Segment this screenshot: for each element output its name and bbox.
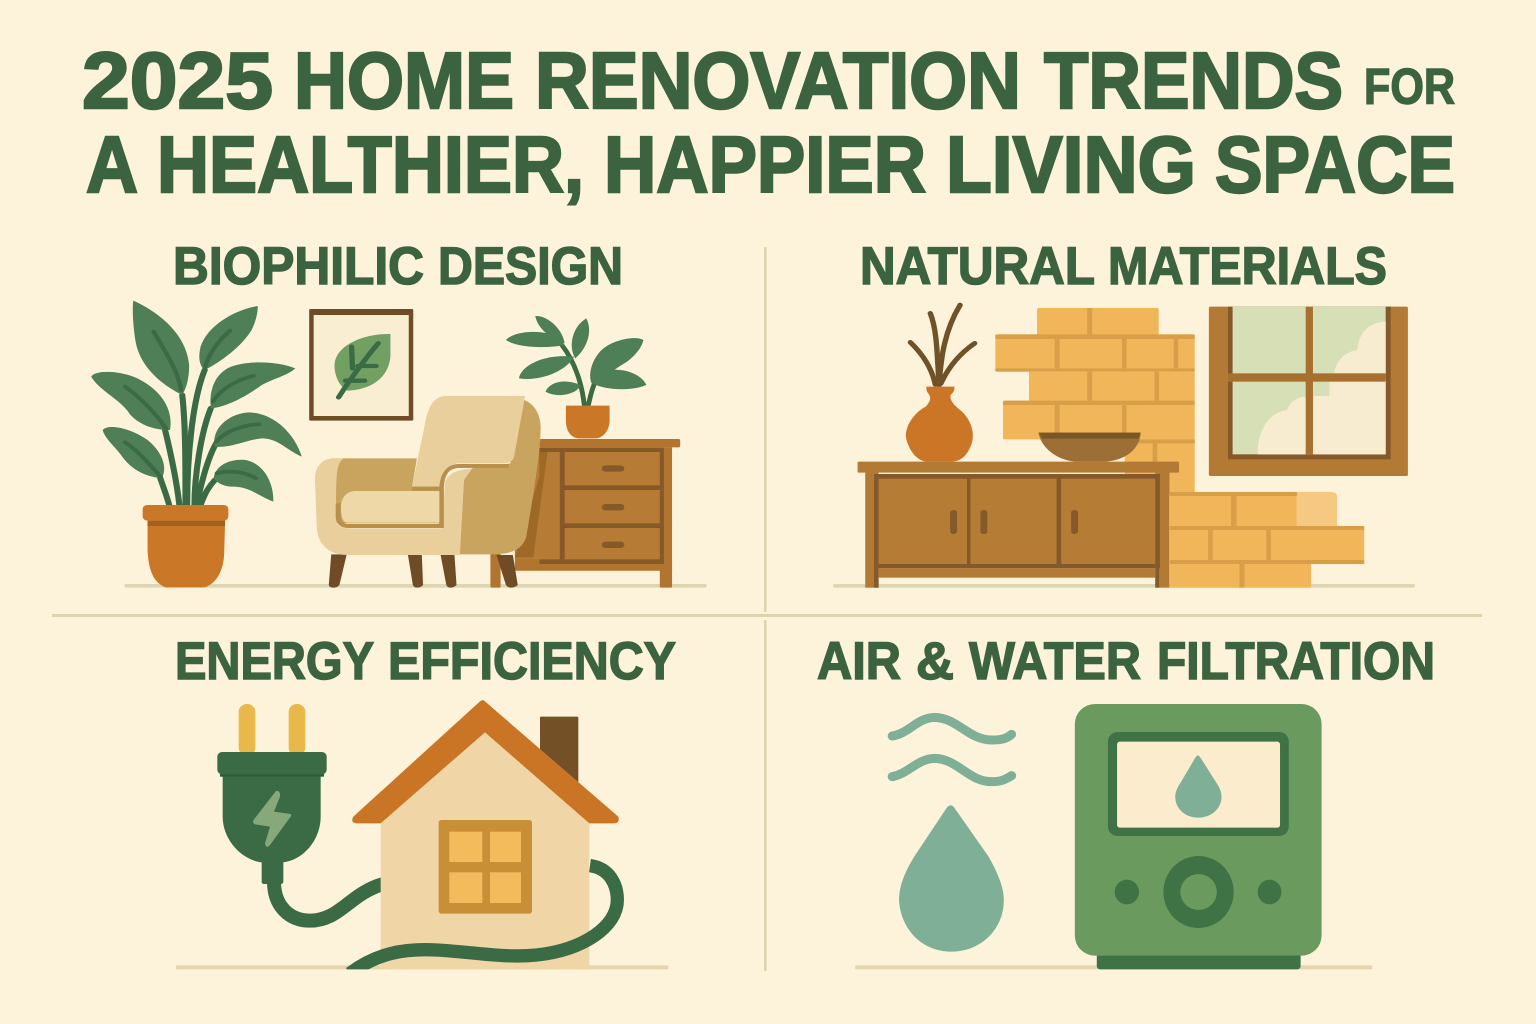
heading: natural materials xyxy=(860,237,1387,296)
title: HAPPIER xyxy=(604,120,926,209)
title: A xyxy=(86,120,138,209)
panel: air and water filtration xyxy=(817,632,1435,969)
icon: water drop xyxy=(899,805,1004,952)
panel: biophilic design xyxy=(91,237,707,588)
heading: air and water filtration xyxy=(817,632,1435,691)
illustration: plug powering a house xyxy=(176,700,668,973)
heading: air and water filtration: AIR xyxy=(817,632,901,691)
icon: armchair xyxy=(315,396,541,588)
icon: house xyxy=(352,700,619,969)
panel: energy efficiency xyxy=(175,632,676,973)
title xyxy=(82,36,1455,209)
icon: vase with twigs xyxy=(906,305,975,462)
title: RENOVATION xyxy=(535,36,1021,125)
heading: biophilic design: BIOPHILIC xyxy=(173,237,424,296)
icon: brick wall xyxy=(995,308,1364,588)
icon: wooden bowl xyxy=(1039,433,1141,462)
heading: natural materials: MATERIALS xyxy=(1108,237,1387,296)
heading: natural materials: NATURAL xyxy=(860,237,1095,296)
title: TRENDS xyxy=(1044,36,1343,125)
heading: energy efficiency: EFFICIENCY xyxy=(388,632,676,691)
heading: air and water filtration: & xyxy=(916,632,954,691)
title: FOR xyxy=(1364,58,1455,114)
title: 2025 xyxy=(82,36,273,125)
icon: wooden sideboard xyxy=(858,462,1179,588)
title: HOME xyxy=(294,36,514,125)
heading: biophilic design: DESIGN xyxy=(438,237,623,296)
illustration: filtration device with air and water xyxy=(855,704,1372,969)
icon: cord wrapping the house xyxy=(350,866,617,973)
heading: energy efficiency xyxy=(175,632,676,691)
icon: wooden dresser xyxy=(490,439,680,588)
icon: air waves xyxy=(892,717,1012,782)
icon: small potted plant xyxy=(506,316,646,438)
icon: window with clouds xyxy=(1209,307,1408,476)
heading: biophilic design xyxy=(173,237,623,296)
heading: energy efficiency: ENERGY xyxy=(175,632,374,691)
heading: air and water filtration: WATER xyxy=(969,632,1141,691)
panel: natural materials xyxy=(833,237,1415,588)
illustration: furniture, brick wall and window xyxy=(833,305,1415,588)
illustration: living room with plants xyxy=(91,301,707,588)
icon: power plug with cord xyxy=(217,704,383,921)
icon: large potted plant xyxy=(91,301,302,587)
title: HEALTHIER, xyxy=(157,120,584,209)
icon: filtration device xyxy=(1075,704,1322,969)
title: LIVING xyxy=(946,120,1196,209)
icon: framed leaf picture xyxy=(309,309,413,421)
title: SPACE xyxy=(1215,120,1455,209)
heading: air and water filtration: FILTRATION xyxy=(1157,632,1435,691)
